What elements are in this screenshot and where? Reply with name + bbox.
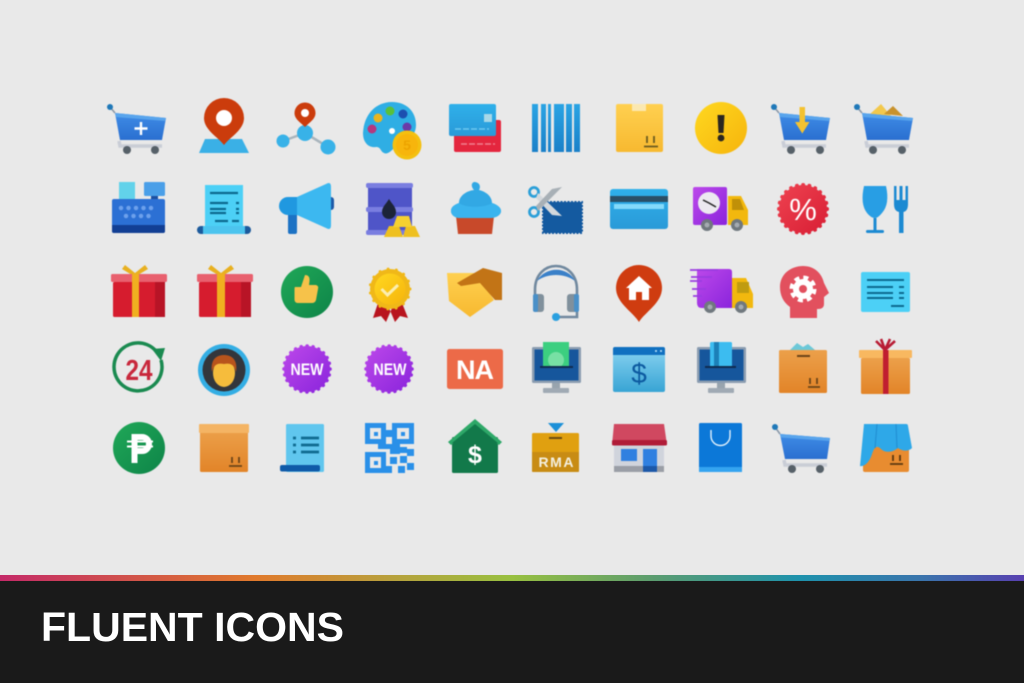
icon: orange gift bbox=[859, 339, 912, 394]
icon: thumbs up bbox=[281, 266, 333, 318]
icon: handshake bbox=[447, 268, 502, 317]
icon: open box bbox=[779, 343, 827, 393]
icon: bank card bbox=[610, 189, 668, 229]
icon: oil barrel and gold bbox=[366, 183, 420, 237]
icon: percent badge: % bbox=[789, 192, 817, 227]
icon: peso coin bbox=[113, 422, 165, 474]
icon: house dollar: $ bbox=[468, 441, 482, 469]
icon: new badge 1 bbox=[284, 346, 330, 392]
icon: home pin bbox=[616, 265, 662, 322]
title: FLUENT ICONS bbox=[41, 604, 344, 650]
icon: map pin bbox=[199, 98, 249, 153]
icon: glass and fork bbox=[863, 186, 908, 233]
icon: RMA box bbox=[532, 423, 579, 472]
icon: new badge 2 bbox=[366, 346, 412, 392]
icon: new badge 2: NEW bbox=[374, 360, 407, 379]
icon: fast truck bbox=[690, 269, 753, 313]
icon: cart download bbox=[771, 104, 830, 154]
icon: award medal bbox=[370, 269, 410, 322]
rainbow divider bar bbox=[0, 575, 1024, 581]
icon: scissors coupon bbox=[530, 187, 582, 233]
icon: percent badge bbox=[779, 185, 827, 233]
icon: closed box bbox=[199, 424, 249, 472]
icon: receipt bbox=[197, 185, 251, 234]
icon: storefront bbox=[612, 424, 667, 472]
icon: gift red 2 bbox=[197, 265, 253, 317]
icon: cupcake bbox=[451, 182, 501, 234]
icon: info card bbox=[861, 272, 910, 312]
icon: headset bbox=[533, 266, 579, 321]
icon: barcode bbox=[532, 104, 580, 152]
icon: document list bbox=[280, 424, 324, 472]
icon: gift red 1 bbox=[111, 265, 167, 317]
icon: NA label: NA bbox=[456, 355, 494, 385]
footer band bbox=[0, 581, 1024, 683]
icon: palette with coin: 5 bbox=[403, 137, 411, 153]
icon: full cart bbox=[854, 104, 913, 154]
icon: new badge 1: NEW bbox=[290, 360, 324, 379]
icon: browser dollar: $ bbox=[631, 358, 647, 389]
icon: megaphone bbox=[279, 183, 334, 234]
icon: empty cart bbox=[772, 424, 830, 473]
icon: QR code bbox=[365, 423, 414, 473]
icon: shopping bag bbox=[699, 423, 742, 472]
icon: 24 hour service bbox=[114, 343, 165, 391]
icon: alert bbox=[695, 102, 747, 154]
icon: house dollar bbox=[448, 419, 502, 473]
icon: credit cards bbox=[449, 104, 501, 152]
icon: monitor money bbox=[532, 342, 581, 393]
icon: palette with coin bbox=[363, 102, 422, 160]
icon: NA label bbox=[447, 349, 503, 389]
icon: cash register bbox=[112, 182, 165, 233]
icon: browser dollar bbox=[613, 347, 665, 392]
icon: monitor card bbox=[697, 342, 746, 393]
icon: cart add bbox=[107, 104, 166, 154]
icon: mind gear bbox=[780, 266, 829, 318]
icon: awning box bbox=[860, 424, 912, 472]
icon: network pin bbox=[276, 102, 336, 154]
icon: 24 hour service: 24 bbox=[126, 355, 152, 387]
icon: avatar bbox=[198, 344, 250, 396]
icon: clock truck bbox=[693, 187, 748, 231]
icon: RMA box: RMA bbox=[538, 454, 574, 470]
icon: yellow box bbox=[616, 104, 663, 152]
